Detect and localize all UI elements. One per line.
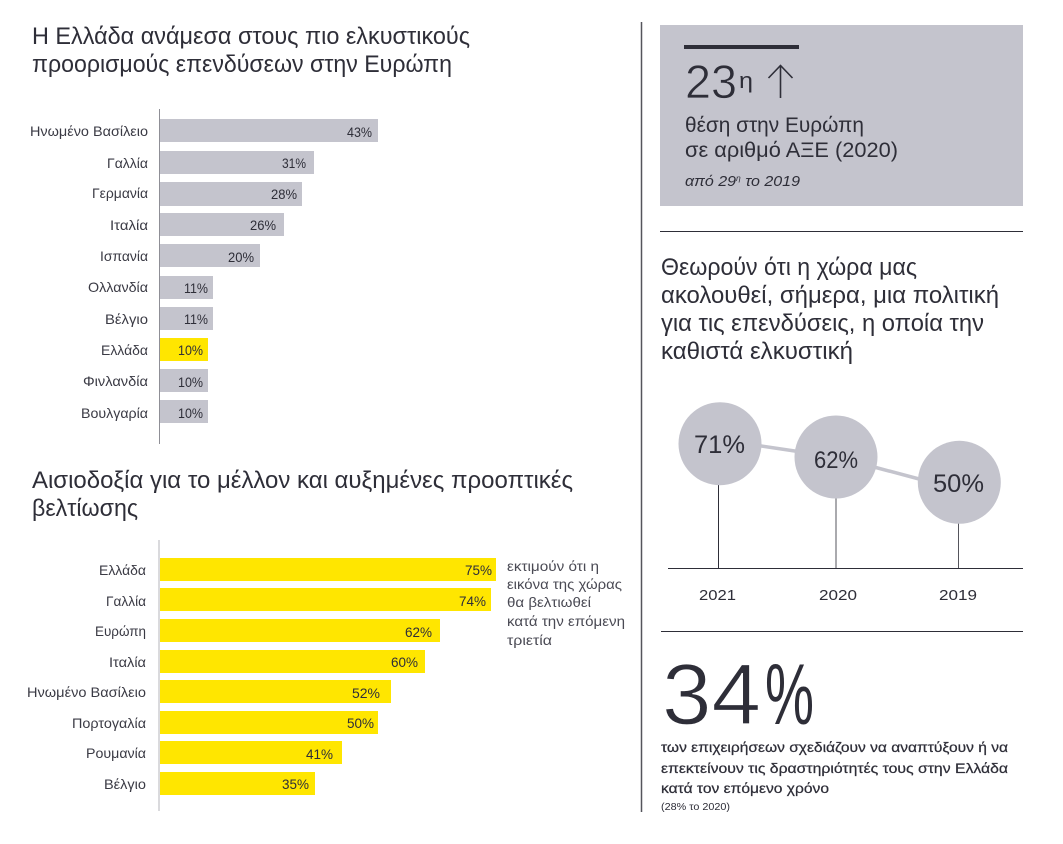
data point: 2019 50%: [918, 441, 1001, 604]
panel: 34% statistic: [661, 647, 1008, 813]
heading: attractive investment policy: [661, 254, 999, 365]
heading: optimism for the future: [32, 467, 573, 522]
bar row: Finland 10%: [83, 369, 208, 392]
bar row: United Kingdom 43%: [30, 119, 378, 142]
text: 28% in 2020: (28% το 2020): [661, 802, 730, 813]
bar row: France 31%: 31%: [282, 155, 306, 171]
bar row: France 31%: [107, 151, 314, 174]
text: companies plan to expand: επεκτείνουν τις δραστηριότητές τους στην Ελλάδα: [661, 760, 1008, 776]
bar row: Romania 41%: Ρουμανία: [86, 745, 146, 761]
heading: attractive investment policy: καθιστά ελκυστική: [661, 338, 853, 365]
text: place in Europe by FDI: σε αριθμό ΑΞΕ (2020): [685, 139, 898, 162]
big number: 34%: 34: [662, 647, 761, 743]
data point: 2020 62%: 62%: [814, 447, 858, 474]
bar row: Spain 20%: [100, 244, 260, 267]
bar row: France 74%: [106, 588, 491, 611]
side note: country image will improve: [507, 558, 625, 648]
data point: 2020 62%: 2020: [819, 587, 857, 604]
bar row: Belgium 35%: [104, 772, 315, 795]
bar row: United Kingdom 52%: Ηνωμένο Βασίλειο: [27, 684, 146, 700]
bar row: Europe 62%: 62%: [405, 624, 432, 640]
big number: 23rd: η: [739, 68, 753, 93]
text: from 29th in 2019: η: [736, 174, 741, 183]
bar row: Portugal 50%: Πορτογαλία: [72, 715, 146, 731]
bar row: France 31%: Γαλλία: [107, 155, 148, 171]
heading: attractive investment policy: για τις επενδύσεις, η οποία την: [661, 310, 984, 337]
bar row: Belgium 11%: 11%: [184, 311, 208, 327]
side note: country image will improve: τριετία: [507, 632, 552, 648]
big number: 23rd: 23: [685, 55, 737, 108]
bar row: United Kingdom 52%: 52%: [352, 685, 380, 701]
panel: 23rd place callout: [660, 25, 1023, 206]
side note: country image will improve: κατά την επόμενη: [507, 613, 625, 629]
big number: 34%: [662, 647, 814, 743]
text: place in Europe by FDI: θέση στην Ευρώπη: [685, 114, 864, 137]
bar row: Italy 60%: Ιταλία: [109, 654, 146, 670]
big number: 34%: %: [765, 647, 814, 743]
bar row: Bulgaria 10%: Βουλγαρία: [81, 405, 148, 421]
bar row: Belgium 35%: 35%: [282, 776, 309, 792]
bar row: France 74%: 74%: [459, 593, 486, 609]
bar row: Germany 28%: [92, 182, 302, 206]
chart: lollipop trend 2021-2019: [668, 402, 1023, 604]
bar row: Netherlands 11%: [88, 276, 213, 299]
bar row: Greece 75%: 75%: [465, 562, 492, 578]
panel: top bar chart section: [30, 23, 470, 444]
bar row: Italy 26%: 26%: [250, 217, 276, 233]
data point: 2021 71%: [678, 402, 762, 604]
text: companies plan to expand: [661, 739, 1008, 796]
bar row: Greece 75%: Ελλάδα: [99, 562, 146, 578]
data point: 2020 62%: [794, 416, 878, 604]
bar row: Europe 62%: [95, 619, 440, 642]
side note: country image will improve: εικόνα της χώρας: [507, 576, 622, 592]
bar row: Greece 10%: 10%: [178, 342, 203, 358]
bar row: Romania 41%: 41%: [306, 746, 333, 762]
bar row: France 74%: Γαλλία: [106, 593, 146, 609]
heading: optimism for the future: βελτίωσης: [32, 495, 138, 522]
data point: 2021 71%: 71%: [694, 431, 745, 459]
side note: country image will improve: εκτιμούν ότι η: [507, 558, 599, 574]
data point: 2019 50%: 50%: [933, 470, 984, 498]
bar row: United Kingdom 52%: [27, 680, 391, 703]
bar row: Belgium 35%: Βέλγιο: [104, 776, 146, 792]
text: from 29th in 2019: το 2019: [741, 173, 801, 190]
bar row: Bulgaria 10%: [81, 400, 208, 423]
bar row: Portugal 50%: [72, 711, 378, 734]
data point: 2019 50%: 2019: [939, 587, 977, 604]
text: from 29th in 2019: από 29: [685, 173, 733, 190]
text: companies plan to expand: των επιχειρήσεων σχεδιάζουν να αναπτύξουν ή να: [661, 739, 1008, 755]
bar row: Italy 60%: 60%: [391, 654, 418, 670]
bar row: Spain 20%: Ισπανία: [100, 248, 148, 264]
bar row: United Kingdom 43%: Ηνωμένο Βασίλειο: [30, 123, 148, 139]
bar row: Portugal 50%: 50%: [347, 715, 374, 731]
heading: attractive investment policy: Θεωρούν ότι η χώρα μας: [661, 254, 917, 281]
heading: Greece among most attractive destinations: [32, 23, 470, 78]
bar row: Netherlands 11%: Ολλανδία: [88, 279, 148, 295]
bar row: Germany 28%: 28%: [271, 186, 297, 202]
bar row: Netherlands 11%: 11%: [184, 280, 208, 296]
panel: bottom bar chart section: [27, 467, 625, 811]
text: place in Europe by FDI: [685, 114, 898, 162]
bar row: Finland 10%: 10%: [178, 374, 203, 390]
icon: up arrow: [768, 66, 792, 98]
bar row: Greece 10%: [101, 338, 208, 361]
bar row: Finland 10%: Φινλανδία: [83, 373, 148, 389]
heading: Greece among most attractive destinations: Η Ελλάδα ανάμεσα στους πιο ελκυστικούς: [32, 23, 470, 50]
heading: optimism for the future: Αισιοδοξία για το μέλλον και αυξημένες προοπτικές: [32, 467, 573, 494]
bar row: Belgium 11%: Βέλγιο: [105, 311, 148, 327]
bar chart: attractive destinations: [30, 109, 378, 444]
bar row: Greece 10%: Ελλάδα: [101, 342, 148, 358]
data point: 2021 71%: 2021: [699, 587, 736, 604]
bar row: Belgium 11%: [105, 307, 213, 330]
bar row: Bulgaria 10%: 10%: [178, 405, 203, 421]
bar row: Italy 26%: [110, 213, 284, 236]
bar row: Italy 60%: [109, 650, 425, 673]
bar row: Greece 75%: [99, 558, 496, 581]
bar row: Europe 62%: Ευρώπη: [95, 623, 146, 639]
bar row: United Kingdom 43%: 43%: [347, 124, 372, 140]
bar row: Germany 28%: Γερμανία: [92, 185, 148, 201]
side note: country image will improve: θα βελτιωθεί: [507, 594, 591, 610]
heading: attractive investment policy: ακολουθεί, σήμερα, μια πολιτική: [661, 282, 999, 309]
bar chart: expected improvement: [27, 540, 496, 811]
heading: Greece among most attractive destinations: προορισμούς επενδύσεων στην Ευρώπη: [32, 51, 452, 78]
bar row: Italy 26%: Ιταλία: [110, 217, 148, 233]
bar row: Romania 41%: [86, 741, 342, 764]
bar row: Spain 20%: 20%: [228, 249, 254, 265]
text: companies plan to expand: κατά τον επόμενο χρόνο: [661, 780, 829, 796]
